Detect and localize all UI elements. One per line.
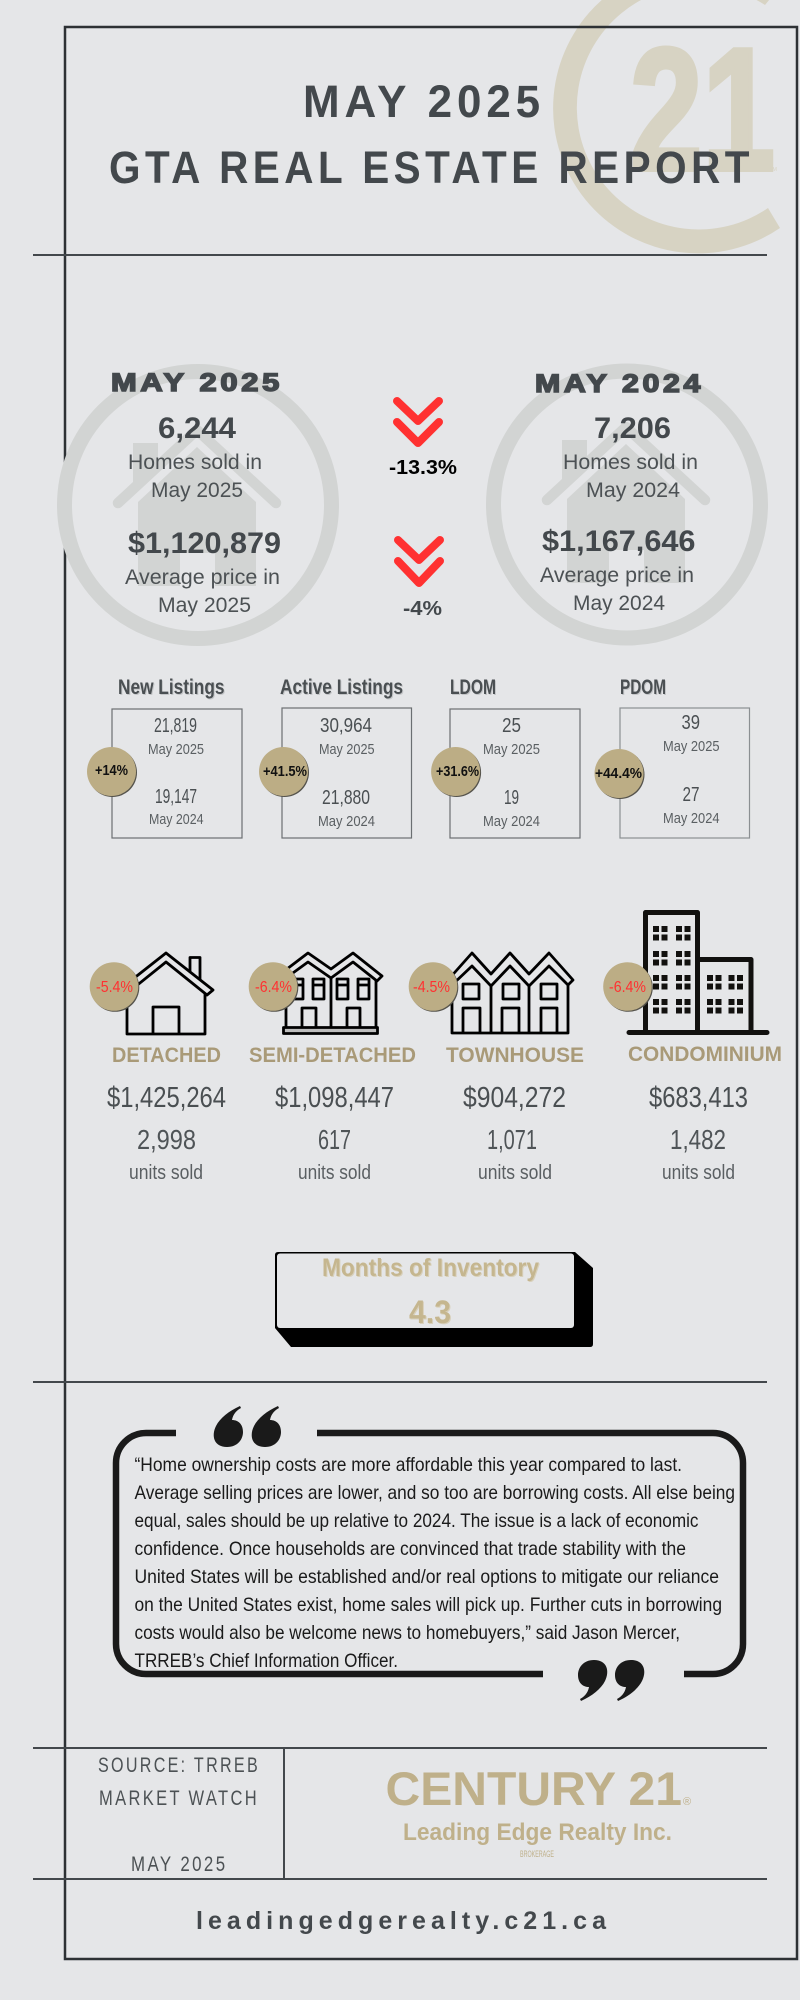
panel: Detached: 2,998 [137,1124,196,1155]
icon: closing quotation mark [578,1660,644,1701]
panel: Active Listings: May 2025 [319,741,374,758]
icon: house in ring, May 2025 [64,372,332,638]
panel: Semi-Detached [249,953,416,1184]
quote text: confidence. Once households are convinced that trade stability with the [134,1538,686,1560]
quote text: on the United States exist, home sales will pick up. Further cuts in borrowing [134,1594,722,1616]
panel: Active Listings [259,676,412,838]
panel: PDOM: PDOM [620,676,666,699]
source note [98,1754,260,1876]
average price May 2025: May 2025 [158,594,251,617]
badge: -5.4% [90,962,138,1011]
source note: MARKET WATCH [99,1787,259,1810]
homes sold May 2024: May 2024 [586,479,680,502]
average price May 2024: May 2024 [573,592,665,615]
icon: detached house [119,953,213,1034]
panel: Townhouse [409,953,584,1184]
panel: Detached [90,953,226,1184]
panel: Condominium: 1,482 [670,1124,726,1155]
icon: townhouse row [448,953,573,1033]
panel: Townhouse: 1,071 [487,1124,537,1155]
panel: LDOM: May 2024 [483,813,540,830]
panel: New Listings: New Listings [118,676,224,699]
logo: Century 21 Leading Edge Realty: Leading Edge Realty Inc. [403,1819,672,1846]
arrow: homes sold down -13.3%: -13.3% [389,457,457,479]
panel: Condominium: $683,413 [649,1082,748,1114]
watermark logo: Century 21 C mark [553,0,780,253]
callout: months of inventory: 4.3 [409,1294,451,1330]
panel: PDOM [594,676,750,838]
quote text: “Home ownership costs are more affordable this year compared to last. [134,1454,682,1476]
panel: Condominium [603,912,782,1184]
panel: May 2024 summary [494,370,760,638]
homes sold May 2024 [563,412,698,502]
badge: -5.4%: -5.4% [96,979,133,996]
source note: MAY 2025 [131,1853,228,1876]
badge: -6.4%: -6.4% [255,979,292,996]
badge: -4.5%: -4.5% [413,979,450,996]
panel: LDOM: May 2025 [483,741,540,758]
icon: condominium towers [629,912,767,1032]
badge: -4.5% [409,962,457,1011]
website url: leadingedgerealty.c21.ca [196,1907,607,1935]
logo: Century 21 Leading Edge Realty: ® [683,1796,691,1808]
quote text: equal, sales should be up relative to 2024. The issue is a lack of economic [134,1510,699,1532]
panel: Semi-Detached: SEMI-DETACHED [249,1044,416,1067]
icon: opening quotation mark [214,1406,281,1447]
average price May 2024 [540,525,696,615]
title [109,76,754,193]
panel: May 2025 summary [64,369,332,638]
panel: New Listings [87,676,242,838]
homes sold May 2025: Homes sold in [128,451,262,474]
quote text: TRREB’s Chief Information Officer. [134,1650,398,1672]
badge: -6.4%: -6.4% [609,979,646,996]
average price May 2024: Average price in [540,564,694,587]
panel: Townhouse: $904,272 [463,1082,566,1114]
badge: +31.6%: +31.6% [436,763,479,780]
panel: Detached: DETACHED [112,1044,221,1067]
panel: Semi-Detached: units sold [298,1162,371,1184]
panel: LDOM: 25 [502,715,521,737]
panel: PDOM: 27 [682,784,700,806]
logo: Century 21 Leading Edge Realty: CENTURY 21 [386,1762,682,1815]
panel: Detached: units sold [129,1162,203,1184]
homes sold May 2025: 6,244 [158,412,236,445]
quote text: costs would also be welcome news to homebuyers,” said Jason Mercer, [134,1622,680,1644]
logo: Century 21 Leading Edge Realty [386,1762,691,1859]
average price May 2025: $1,120,879 [128,527,281,560]
quote text: Average selling prices are lower, and so too are borrowing costs. All else being [134,1482,735,1504]
quote frame [116,1433,743,1674]
heading: May 2024: MAY 2024 [535,370,704,398]
source note: SOURCE: TRREB [98,1754,260,1777]
title: MAY 2025 [303,76,545,127]
homes sold May 2025: May 2025 [151,479,243,502]
badge: +44.4%: +44.4% [595,765,642,782]
panel: Townhouse: TOWNHOUSE [446,1044,584,1067]
panel: Semi-Detached: $1,098,447 [275,1082,394,1114]
badge: +41.5% [259,747,308,796]
arrow: average price down -4%: -4% [403,598,442,620]
badge: -6.4% [603,962,652,1011]
heading: May 2025: MAY 2025 [111,369,283,397]
badge: -6.4% [249,962,297,1011]
badge: +44.4% [594,749,644,798]
quote text: United States will be established and/or real options to mitigate our reliance [134,1566,719,1588]
panel: Active Listings: 21,880 [322,787,370,809]
panel: New Listings: May 2025 [148,741,204,758]
logo: Century 21 Leading Edge Realty: BROKERAGE [520,1849,554,1859]
panel: LDOM: 19 [504,787,519,809]
panel: PDOM: 39 [682,712,700,734]
panel: Townhouse: units sold [478,1162,552,1184]
homes sold May 2025 [128,412,262,502]
watermark logo: Century 21 C mark: SM [769,167,777,173]
badge: +31.6% [431,747,480,796]
panel: quote [116,1406,743,1701]
homes sold May 2024: Homes sold in [563,451,698,474]
arrow: homes sold down -13.3% [389,401,457,479]
panel: PDOM: May 2025 [663,738,720,755]
average price May 2025: Average price in [125,566,280,589]
icon: semi-detached house [283,953,382,1034]
callout: months of inventory [275,1252,593,1347]
panel: Condominium: units sold [662,1162,735,1184]
panel: New Listings: 19,147 [155,786,197,808]
icon: house in ring, May 2024 [494,371,760,638]
callout: months of inventory: Months of Inventory [322,1254,539,1282]
badge: +14% [87,747,136,796]
panel: Active Listings: 30,964 [320,715,372,737]
quote text [134,1454,735,1672]
panel: New Listings: 21,819 [154,715,197,737]
arrow: average price down -4% [398,540,442,620]
average price May 2025 [125,527,281,617]
homes sold May 2024: 7,206 [594,412,671,445]
panel: LDOM [431,676,580,838]
badge: +14%: +14% [95,762,128,779]
panel: PDOM: May 2024 [663,810,720,827]
average price May 2024: $1,167,646 [542,525,696,558]
panel: Condominium: CONDOMINIUM [628,1043,782,1066]
panel: Active Listings: May 2024 [318,813,375,830]
panel: Active Listings: Active Listings [280,676,403,699]
panel: Semi-Detached: 617 [318,1124,351,1155]
panel: New Listings: May 2024 [149,811,204,828]
panel: LDOM: LDOM [450,676,496,699]
panel: Detached: $1,425,264 [107,1082,226,1114]
badge: +41.5%: +41.5% [263,763,307,780]
